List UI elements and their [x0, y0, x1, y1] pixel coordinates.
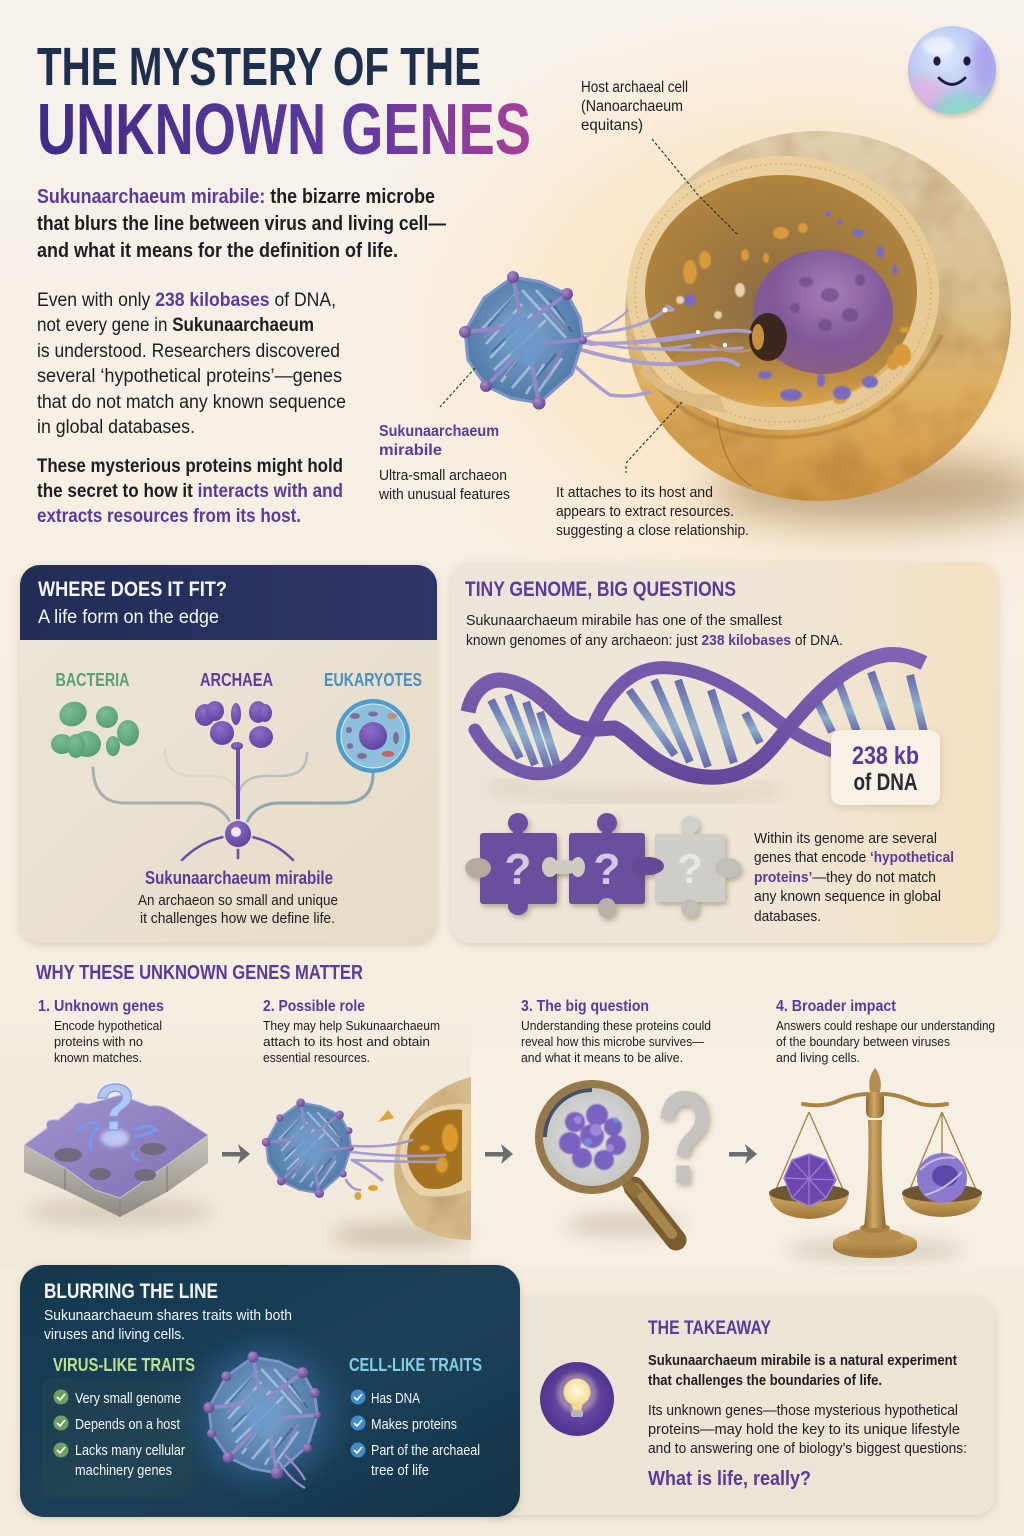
- takeaway text: Its unknown genes—those mysterious hypothetical: [648, 1402, 958, 1419]
- subtitle: Sukunaarchaeum mirabile: the bizarre microbe: [37, 186, 435, 208]
- icon: microbe attaching to host: [262, 1077, 471, 1247]
- step 4 text: [776, 998, 995, 1065]
- subtitle: and what it means for the definition of life.: [37, 240, 398, 262]
- label: Sukunaarchaeum mirabile: mirabile: [379, 442, 442, 459]
- icon: balance scale: [769, 1068, 982, 1261]
- panel: tiny genome: [451, 563, 998, 943]
- label: Sukunaarchaeum mirabile: [378, 423, 510, 503]
- step 4 text: Answers could reshape our understanding: [776, 1018, 995, 1033]
- highlighted statement: the secret to how it interacts with and: [37, 481, 343, 502]
- panel header: WHERE DOES IT FIT?: [38, 578, 227, 601]
- hypothetical proteins note: databases.: [754, 908, 821, 925]
- panel: where does it fit: [20, 565, 437, 943]
- eukaryotes group: EUKARYOTES: [324, 670, 422, 690]
- species caption: [138, 868, 338, 927]
- highlighted statement: extracts resources from its host.: [37, 506, 301, 527]
- illustration: Sukunaarchaeum virus-like particle: [459, 271, 587, 410]
- label: Sukunaarchaeum mirabile: Ultra-small archaeon: [379, 467, 507, 484]
- takeaway text: [648, 1318, 967, 1490]
- hypothetical proteins note: genes that encode ‘hypothetical: [754, 849, 954, 866]
- bacteria group: [51, 670, 139, 758]
- icon: magnifying glass with question mark: [539, 1064, 714, 1240]
- puzzle piece 3: [632, 816, 741, 917]
- tree of life diagram: [93, 750, 373, 860]
- step 3 text: Understanding these proteins could: [521, 1018, 711, 1033]
- icon: smiling mascot bubble: [903, 26, 997, 118]
- takeaway text: Sukunaarchaeum mirabile is a natural experiment: [648, 1352, 957, 1369]
- blurring heading: Sukunaarchaeum shares traits with both: [44, 1307, 292, 1324]
- step 1 text: 1. Unknown genes: [38, 998, 164, 1015]
- archaea group: ARCHAEA: [200, 670, 273, 690]
- highlighted statement: [37, 456, 343, 527]
- step 2 text: essential resources.: [263, 1050, 370, 1065]
- label: host archaeal cell: equitans): [581, 117, 643, 134]
- species caption: it challenges how we define life.: [140, 910, 335, 927]
- panel header: A life form on the edge: [38, 607, 219, 628]
- label: attachment note: It attaches to its host and: [556, 484, 713, 501]
- cell-like traits list: CELL-LIKE TRAITS: [349, 1355, 482, 1375]
- genome heading: known genomes of any archaeon: just 238 kilobases of DNA.: [466, 632, 843, 649]
- blurring heading: viruses and living cells.: [44, 1326, 185, 1343]
- arrow 1: [222, 1144, 250, 1164]
- step 2 text: attach to its host and obtain: [263, 1034, 430, 1049]
- genome heading: TINY GENOME, BIG QUESTIONS: [465, 578, 736, 601]
- label: attachment note: [556, 484, 749, 539]
- illustration: host archaeal cell cutaway: [575, 131, 1024, 524]
- intro text block: not every gene in Sukunaarchaeum: [37, 315, 314, 336]
- virus-like traits list: Lacks many cellular: [75, 1443, 185, 1459]
- step 4 text: 4. Broader impact: [776, 998, 896, 1015]
- hypothetical proteins note: proteins’—they do not match: [754, 869, 936, 886]
- species caption: Sukunaarchaeum mirabile: [145, 868, 333, 888]
- archaea group: [195, 670, 273, 750]
- title: [37, 37, 531, 170]
- bacteria group: BACTERIA: [56, 670, 130, 690]
- step 1 text: [38, 998, 164, 1065]
- label: host archaeal cell: Host archaeal cell: [581, 79, 688, 96]
- intro text block: that do not match any known sequence: [37, 392, 346, 413]
- blurring heading: [44, 1280, 292, 1343]
- virus-like traits list: Depends on a host: [75, 1417, 180, 1433]
- hypothetical proteins note: any known sequence in global: [754, 888, 941, 905]
- virus-like traits list: Very small genome: [75, 1391, 181, 1407]
- highlighted statement: These mysterious proteins might hold: [37, 456, 343, 477]
- label: host archaeal cell: (Nanoarchaeum: [581, 98, 683, 115]
- step 1 text: proteins with no: [54, 1034, 143, 1049]
- subtitle: [37, 186, 446, 262]
- puzzle piece 2: ?: [594, 845, 620, 894]
- genome heading: Sukunaarchaeum mirabile has one of the smallest: [466, 612, 783, 629]
- genome heading: [465, 578, 843, 649]
- label: attachment note: suggesting a close relationship.: [556, 522, 749, 539]
- intro text block: Even with only 238 kilobases of DNA,: [37, 290, 336, 311]
- eukaryotes group: [324, 670, 422, 773]
- intro text block: [37, 290, 346, 438]
- callout line: host cell: [652, 139, 738, 235]
- stat card: 238 kb of DNA: of DNA: [854, 769, 918, 796]
- label: host archaeal cell: [581, 79, 688, 134]
- arrow 2: [485, 1144, 513, 1164]
- takeaway text: and to answering one of biology’s biggest questions:: [648, 1440, 967, 1457]
- icon: magnifying glass with question mark: ?: [656, 1064, 714, 1211]
- puzzle piece 1: ?: [505, 845, 531, 894]
- icon: isometric puzzle with glowing question mark: [24, 1070, 215, 1226]
- hypothetical proteins note: [754, 830, 954, 925]
- section heading: why genes matter: WHY THESE UNKNOWN GENES MATTER: [36, 962, 363, 984]
- puzzle piece 1: [465, 813, 557, 915]
- label: Sukunaarchaeum mirabile: with unusual features: [378, 486, 510, 503]
- DNA double helix: [468, 654, 924, 797]
- central virus illustration: [175, 1325, 355, 1505]
- step 2 text: [263, 998, 440, 1065]
- species caption: An archaeon so small and unique: [138, 892, 338, 909]
- puzzle piece 3: ?: [677, 845, 703, 892]
- cell-like traits list: Part of the archaeal: [371, 1443, 480, 1459]
- step 3 text: and what it means to be alive.: [521, 1050, 683, 1065]
- stat card: 238 kb of DNA: 238 kb: [852, 742, 919, 770]
- takeaway text: proteins—may hold the key to its unique lifestyle: [648, 1421, 960, 1438]
- step 2 text: 2. Possible role: [263, 998, 365, 1015]
- step 4 text: and living cells.: [776, 1050, 860, 1065]
- intro text block: in global databases.: [37, 417, 195, 438]
- virus-like traits list: [53, 1355, 195, 1479]
- callout line: attachment: [626, 402, 682, 473]
- step 1 text: Encode hypothetical: [54, 1018, 162, 1033]
- step 4 text: of the boundary between viruses: [776, 1034, 950, 1049]
- takeaway text: What is life, really?: [648, 1468, 811, 1490]
- blurring heading: BLURRING THE LINE: [44, 1280, 218, 1303]
- puzzle piece 2: [542, 813, 645, 918]
- panel: blurring the line: [20, 1265, 520, 1517]
- puzzle pieces: [465, 813, 741, 918]
- title: THE MYSTERY OF THE: [37, 37, 481, 97]
- takeaway text: that challenges the boundaries of life.: [648, 1372, 882, 1389]
- step 3 text: 3. The big question: [521, 998, 649, 1015]
- title: UNKNOWN GENES: [37, 90, 531, 170]
- intro text block: is understood. Researchers discovered: [37, 341, 340, 362]
- hypothetical proteins note: Within its genome are several: [754, 830, 937, 847]
- label: Sukunaarchaeum mirabile: Sukunaarchaeum: [379, 423, 499, 440]
- virus-like traits list: VIRUS-LIKE TRAITS: [53, 1355, 195, 1375]
- icon: isometric puzzle with glowing question mark: ?: [95, 1070, 135, 1144]
- step 1 text: known matches.: [54, 1050, 142, 1065]
- cell-like traits list: [349, 1355, 482, 1479]
- subtitle: that blurs the line between virus and living cell—: [37, 213, 446, 235]
- stat card: 238 kb of DNA: [831, 730, 940, 805]
- takeaway text: THE TAKEAWAY: [648, 1318, 771, 1339]
- callout line: archaeon: [440, 368, 475, 407]
- cell-like traits list: Makes proteins: [371, 1417, 457, 1433]
- arrow 3: [729, 1144, 757, 1164]
- panel header: [20, 565, 437, 640]
- virus-like traits list: machinery genes: [75, 1463, 172, 1479]
- cell-like traits list: tree of life: [371, 1463, 429, 1479]
- label: attachment note: appears to extract resources.: [556, 503, 734, 520]
- icon: lightbulb: [540, 1362, 614, 1436]
- step 3 text: [521, 998, 711, 1065]
- step 3 text: reveal how this microbe survives—: [521, 1034, 704, 1049]
- step 2 text: They may help Sukunaarchaeum: [263, 1018, 440, 1033]
- panel: the takeaway: [480, 1297, 995, 1515]
- intro text block: several ‘hypothetical proteins’—genes: [37, 366, 342, 387]
- cell-like traits list: Has DNA: [371, 1391, 420, 1407]
